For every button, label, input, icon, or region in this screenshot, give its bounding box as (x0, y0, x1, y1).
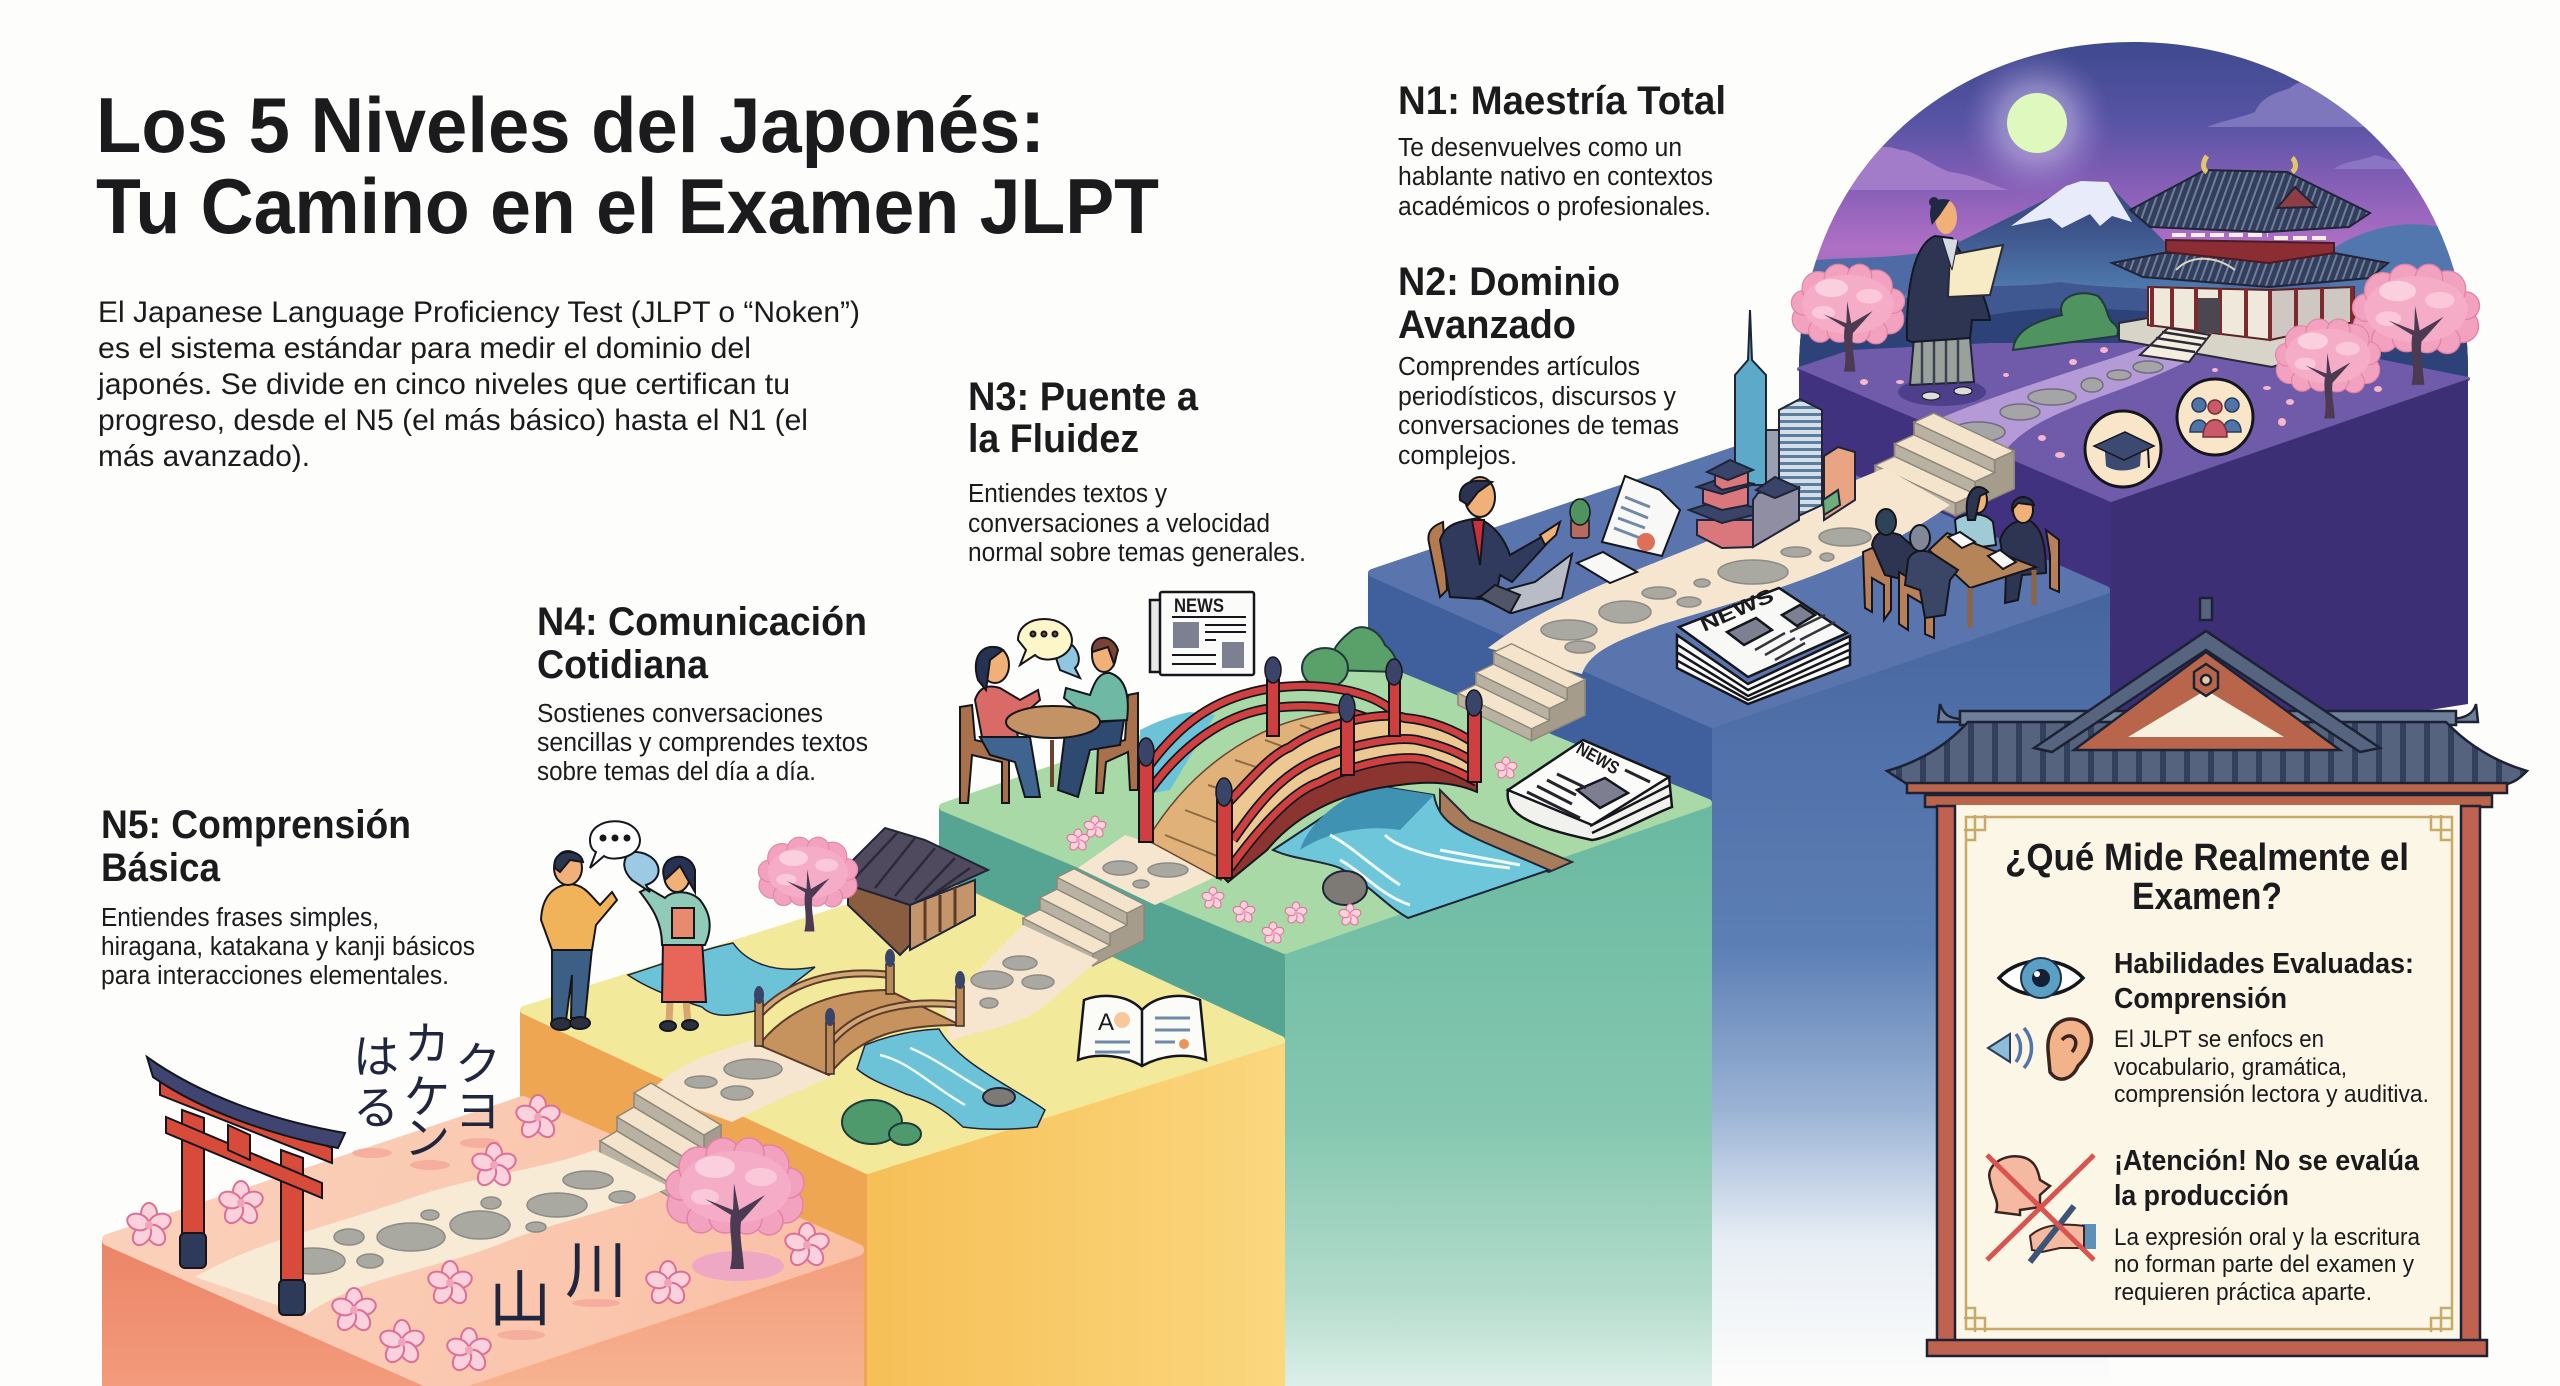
plant (1570, 499, 1590, 538)
stairs N5 to N4 (600, 1083, 721, 1197)
icon: news sheet (1150, 592, 1254, 675)
N4 right side (867, 1040, 1285, 1386)
text block N2: complejos. (1398, 442, 1517, 470)
text block N5 (101, 803, 475, 990)
wooden bridge (754, 949, 965, 1075)
stones N3 (1103, 861, 1188, 888)
N2 top (1372, 440, 2106, 724)
beige path N4 lower (650, 1035, 835, 1122)
section: warning: la producción (2114, 1180, 2289, 1212)
samurai with scroll (1898, 197, 2003, 406)
pagoda model (1689, 460, 1799, 548)
text block N3: la Fluidez (968, 417, 1139, 461)
torii gate (147, 1057, 345, 1315)
title (96, 81, 1159, 250)
couple at table (960, 638, 1138, 803)
river shadow under bridge (1300, 785, 1434, 850)
petals N3 (1066, 757, 1518, 945)
sign roof (1887, 598, 2527, 807)
text block N5: para interacciones elementales. (101, 962, 449, 990)
text block N1: hablante nativo en contextos (1398, 163, 1713, 191)
icon: group of people (2177, 379, 2253, 455)
N4 top (524, 880, 1281, 1170)
night sky arch (1799, 42, 2468, 377)
speech bubbles N3 (1018, 619, 1080, 678)
river N4 upper (628, 943, 815, 1015)
text block N4: sobre temas del día a día. (537, 758, 816, 786)
tier N3: puente a la fluidez (939, 592, 1712, 1386)
section: skills (2114, 948, 2429, 1108)
text block N2: Comprendes artículos (1398, 353, 1640, 381)
lilac path (1925, 345, 2190, 470)
N5 right side (443, 1250, 864, 1386)
text block N4 (537, 600, 868, 786)
text block N2: Avanzado (1398, 303, 1576, 347)
beige path N4 upper (945, 925, 1098, 1042)
text block N3: conversaciones a velocidad (968, 510, 1270, 538)
upper river N3 (1140, 712, 1215, 795)
kana: ka ke n: ケ (404, 1061, 450, 1127)
N4 left side (520, 1010, 867, 1386)
section: skills: vocabulario, gramática, (2114, 1054, 2347, 1081)
kanji: kawa: 川 (565, 1220, 627, 1310)
icon: eye (1999, 958, 2083, 998)
woman talking (640, 857, 710, 1031)
kana: ka ke n: ン (404, 1102, 450, 1168)
tier N2: dominio avanzado (1368, 310, 2110, 1386)
section: warning (2114, 1145, 2420, 1306)
text block N1: N1: Maestría Total (1398, 79, 1726, 123)
text block N5: N5: Comprensión (101, 803, 411, 847)
newspaper stack N2 (1677, 585, 1850, 704)
intro paragraph: japonés. Se divide en cinco niveles que certifican tu (97, 368, 790, 401)
text block N2: conversaciones de temas (1398, 412, 1679, 440)
stepping stones N2 (1541, 528, 1871, 653)
cherry blossom flowers (125, 1095, 831, 1374)
N5 left side (102, 1240, 443, 1386)
sign pillars (1927, 806, 2487, 1356)
N3 right side (1285, 803, 1712, 1386)
icon: ear (2048, 1019, 2091, 1079)
icon: speaker and sound (1988, 1028, 2032, 1068)
stairs N4 to N3 (1023, 869, 1144, 966)
text block N4: sencillas y comprendes textos (537, 729, 868, 757)
sign heading (2005, 837, 2409, 918)
cherry tree N1 left (1791, 264, 1905, 372)
intro paragraph: es el sistema estándar para medir el dominio del (98, 332, 751, 365)
icon: news sheet: NEWS (1174, 596, 1224, 617)
icon: open book: A (1098, 1009, 1114, 1036)
rock N4 (983, 1088, 1015, 1106)
kana: ha ru: る (353, 1072, 399, 1138)
icon: open book (1078, 996, 1206, 1066)
intro paragraph: El Japanese Language Proficiency Test (JLPT o “Noken”) (98, 296, 860, 329)
text block N4: Cotidiana (537, 643, 709, 687)
section: skills: Comprensión (2114, 983, 2287, 1015)
stepping stones N5 (281, 1171, 635, 1274)
text block N1: académicos o profesionales. (1398, 193, 1711, 221)
icon: graduation cap (2085, 411, 2161, 487)
text block N1 (1398, 79, 1726, 221)
sign heading: ¿Qué Mide Realmente el (2005, 837, 2409, 879)
intro paragraph: progreso, desde el N5 (el más básico) hasta el N1 (el (98, 404, 808, 437)
section: warning: requieren práctica aparte. (2114, 1279, 2372, 1306)
gold inner border (1964, 815, 2452, 1332)
N1 top ground (1799, 345, 2468, 500)
city skyline (1735, 310, 1855, 525)
kana: ha ru: は (353, 1021, 399, 1087)
section: skills: El JLPT se enfocs en (2114, 1026, 2324, 1053)
N1 right side (2111, 379, 2468, 760)
tier N5: comprensión básica (102, 1008, 864, 1386)
section: warning: ¡Atención! No se evalúa (2114, 1145, 2420, 1177)
wooden house (833, 828, 988, 955)
stairs N3 to N2 (1458, 644, 1585, 741)
N1 left side (1799, 369, 2111, 800)
cherry tree N1 right (2353, 264, 2479, 385)
petals N1 (1860, 347, 2382, 458)
text block N3: Entiendes textos y (968, 480, 1167, 508)
newspaper on N3: NEWS (1573, 738, 1623, 778)
temple (2112, 156, 2388, 367)
section: warning: La expresión oral y la escritura (2114, 1224, 2420, 1251)
businessman with laptop (1428, 477, 1572, 613)
newspaper on N3 (1508, 738, 1672, 840)
N2 left side (1368, 573, 1712, 1386)
bush N4 (842, 1100, 921, 1145)
river N3 (1273, 785, 1549, 918)
newspaper stack N2: NEWS (1697, 585, 1777, 637)
kanji: yama: 山 (489, 1249, 551, 1339)
rock in river (1323, 871, 1367, 905)
tree shadow (692, 1251, 784, 1281)
pink petal patches (352, 1138, 620, 1340)
document with seal (1602, 476, 1680, 556)
text block N1: Te desenvuelves como un (1398, 134, 1682, 162)
speech bubbles N4 (590, 821, 659, 892)
tier N1: maestría total (1790, 42, 2480, 710)
kana: ku yo: ヨ (455, 1075, 501, 1141)
text block N3: normal sobre temas generales. (968, 539, 1306, 567)
bush on N3 (1302, 627, 1398, 688)
intro paragraph: más avanzado). (98, 440, 310, 473)
text block N3 (968, 375, 1306, 567)
N5 top (108, 1102, 858, 1386)
river N4 lower (857, 1029, 1045, 1129)
beige path N5 (195, 1150, 670, 1315)
title: Los 5 Niveles del Japonés: (96, 81, 1045, 169)
river bank (1440, 790, 1572, 872)
text block N5: Básica (101, 846, 221, 890)
section: skills: Habilidades Evaluadas: (2114, 948, 2414, 980)
text block N2 (1398, 260, 1679, 470)
red bridge (1138, 657, 1482, 882)
text block N2: N2: Dominio (1398, 260, 1620, 304)
text block N5: hiragana, katakana y kanji básicos (101, 933, 475, 961)
sign heading: Examen? (2132, 876, 2282, 918)
man talking (541, 851, 617, 1030)
kana: ka ke n: カ (404, 1008, 450, 1074)
N2 right side (1712, 590, 2110, 1386)
stepping stones N1 (1951, 361, 2163, 442)
beige path N2 (1488, 468, 1950, 674)
cherry tree N1 front (2276, 319, 2380, 419)
section: warning: no forman parte del examen y (2114, 1251, 2415, 1278)
intro paragraph (97, 296, 860, 473)
N3 left side (939, 807, 1285, 1386)
section: skills: comprensión lectora y auditiva. (2114, 1081, 2429, 1108)
text block N4: N4: Comunicación (537, 600, 867, 644)
cherry tree N5 (666, 1138, 804, 1269)
icon: head crossed out with hand and pen (1987, 1155, 2096, 1262)
sign board (1955, 805, 2462, 1340)
text block N3: N3: Puente a (968, 375, 1199, 419)
text block N5: Entiendes frases simples, (101, 904, 379, 932)
text block N2: periodísticos, discursos y (1398, 383, 1676, 411)
panel: temple sign (1887, 598, 2527, 1356)
cherry tree N4 (758, 837, 858, 931)
kana: ku yo: ク (455, 1028, 501, 1094)
stepping stones N4 (685, 956, 1054, 1100)
meeting table (1863, 487, 2059, 638)
N3 top (943, 662, 1708, 950)
tier N4: comunicación cotidiana (520, 821, 1285, 1386)
bush behind samurai (2013, 293, 2118, 350)
text block N4: Sostienes conversaciones (537, 700, 823, 728)
title: Tu Camino en el Examen JLPT (96, 162, 1159, 250)
beige path N3 (1078, 835, 1230, 905)
stairs N2 to N1 (1875, 413, 2014, 516)
small papers (1577, 552, 1637, 583)
